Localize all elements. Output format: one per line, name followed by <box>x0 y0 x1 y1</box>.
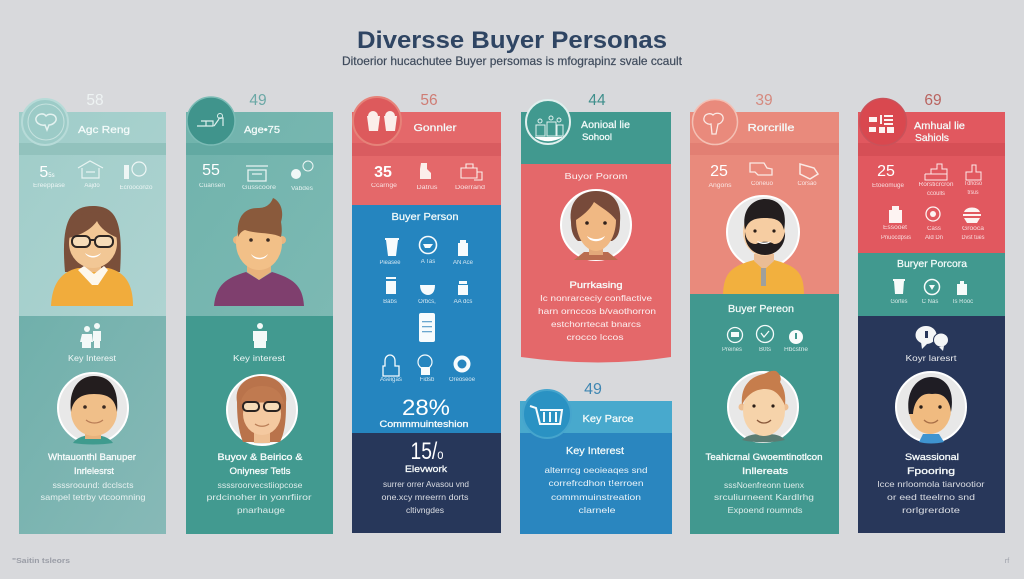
header label <box>914 120 965 144</box>
icon row: Hbcstne <box>784 347 809 353</box>
text block: or eed tteelrno snd <box>887 492 975 502</box>
avatar: man red hair <box>728 371 798 442</box>
header label: Agc Reng <box>78 124 130 136</box>
stat row: Cuansen <box>199 183 225 189</box>
text block: crocco lccos <box>566 332 624 342</box>
number: 56: 56 <box>420 92 438 109</box>
avatar: woman short hair <box>561 190 631 260</box>
stat row: Datrus <box>416 185 438 191</box>
icon grid: A Tas <box>421 259 435 265</box>
stat grid: Dvst tues <box>962 235 984 241</box>
footer note: left: "Saitin tsleors <box>12 558 70 565</box>
text block: prdcinoher in yonrfiiror <box>206 492 312 502</box>
stat row <box>708 163 818 189</box>
stat grid: ccoulls <box>927 191 945 197</box>
stat row <box>199 161 313 192</box>
text block: ssssroorvecstiiopcose <box>218 480 303 490</box>
icon grid: Oreoseoe <box>449 377 476 383</box>
stat row: 25 <box>710 163 728 180</box>
label: elevwork: Elevwork <box>405 464 447 475</box>
header label: Gonnler <box>414 122 457 134</box>
text block: Teahicrnal Gwoemtinotlcon <box>706 452 822 463</box>
icon: people <box>80 323 101 348</box>
person: bearded man <box>723 196 804 294</box>
person: woman with glasses <box>51 206 133 306</box>
icon row: Preines <box>722 347 742 353</box>
text block <box>40 452 146 502</box>
stat grid: Essooet <box>883 225 907 231</box>
text block <box>538 280 656 342</box>
header label: Sahiols <box>915 132 949 144</box>
text block: Buyov & Beirico & <box>218 452 303 463</box>
icon grid: Babs <box>383 299 397 305</box>
text block: lcce nrloomola tiarvootior <box>878 479 985 489</box>
stat grid: trsus <box>968 190 978 196</box>
person: man brown hair <box>214 198 304 306</box>
icon: cart badge <box>523 390 571 438</box>
text block: estchorrtecat bnarcs <box>551 319 641 329</box>
panel: persona 4 top <box>521 92 671 362</box>
icon grid: AA dcs <box>454 299 472 305</box>
stat grid: Tdhoso <box>964 181 983 187</box>
text block: Swassional <box>905 452 959 463</box>
stat row: Corsao <box>798 181 817 187</box>
text block: alterrrcg oeoieaqes snd <box>544 465 648 475</box>
text block: sssNoenfreonn tuenx <box>724 480 805 490</box>
text block: sampel tetrby vtcoomning <box>40 492 146 502</box>
icon grid: Pieasee <box>380 260 401 266</box>
avatar: woman glasses <box>227 375 297 445</box>
panel: persona 6 <box>858 92 1005 533</box>
text block: Oniynesr Tetls <box>230 466 291 477</box>
header label: Aonioal lie <box>581 119 630 131</box>
text block: srculiurneent Kardlrhg <box>714 492 814 502</box>
text block: Expoend roumnds <box>728 505 802 515</box>
text block: commmuinstreation <box>551 492 641 502</box>
text block: cltivngdes <box>406 505 444 515</box>
stat: 28%: 28% <box>402 395 450 420</box>
stat grid: Etoeomuge <box>872 183 905 189</box>
panel: persona 5 <box>690 92 839 534</box>
icon: chat bubbles <box>916 326 948 351</box>
text block <box>206 452 312 515</box>
header label: Rorcrille <box>748 122 795 134</box>
stat grid: Grooca <box>962 226 985 232</box>
header label: Amhual lie <box>914 120 965 132</box>
panel: persona 2 <box>186 92 333 534</box>
header label: Sohool <box>582 132 612 142</box>
text block: Ic nonrarceciy conflactive <box>540 293 652 303</box>
header label <box>581 119 630 142</box>
label: key interest: Koyr laresrt <box>906 353 957 363</box>
stat row <box>33 161 153 191</box>
text block: Purrkasing <box>570 280 622 291</box>
icon grid: Fidsb <box>420 377 435 383</box>
stat row: Ecrooconzo <box>120 185 153 191</box>
icon: person <box>253 323 267 348</box>
text block: correfrcdhon t!erroen <box>548 478 644 488</box>
panel: persona 4 bottom <box>520 381 672 534</box>
text block <box>706 452 822 515</box>
stat grid: Rorsticrcron <box>918 182 954 188</box>
text block <box>544 465 648 515</box>
icon row: Is Rooc <box>953 299 973 305</box>
stat row: Ereeppase <box>33 183 66 189</box>
header label: Key Parce <box>582 413 634 425</box>
icon: list badge <box>860 98 906 146</box>
icon: two figures badge <box>353 97 401 145</box>
text block: rorlgrerdote <box>902 505 960 515</box>
stat row: Doerrand <box>455 185 485 191</box>
text block: harn ornccos b/vaothorron <box>538 306 656 316</box>
icon: badge <box>187 97 235 145</box>
icon grid: AN Ace <box>453 260 474 266</box>
icon grid <box>380 236 476 383</box>
text block: Fpooring <box>907 466 955 477</box>
text block: surrer orrer Avasou vnd <box>383 479 469 489</box>
text block <box>382 479 469 515</box>
icon row: Gortes <box>890 299 908 305</box>
header label: Age•75 <box>244 124 280 136</box>
text block: Inrlelesrst <box>74 466 114 477</box>
subtitle: Ditoerior hucachutee Buyer persomas is mfograpinz svale ccault <box>342 54 683 68</box>
footer note: right: rf <box>1005 558 1009 565</box>
text block <box>878 452 985 515</box>
label: key interest: Key Interest <box>68 353 117 363</box>
stat grid: Pnuocdpsis <box>881 235 911 241</box>
text block: pnarhauge <box>237 505 285 515</box>
icon row: C Nas <box>922 299 938 305</box>
icon grid: Aseigas <box>380 377 402 383</box>
avatar: man dark hair <box>58 373 128 444</box>
avatar: man black hair <box>896 372 966 444</box>
icon row <box>890 279 973 305</box>
text block: ssssroound: dcclscts <box>52 480 134 490</box>
stat row: Vabdes <box>291 186 313 192</box>
stat row: 35 <box>374 164 392 181</box>
stat row: 55s <box>39 164 55 181</box>
icon: brain badge <box>692 100 738 144</box>
icon: group badge <box>526 100 570 144</box>
stat grid: Ald Dn <box>925 235 943 241</box>
text block: Inllereats <box>742 466 788 477</box>
heading: buyer person: Buyer Pereon <box>728 303 794 315</box>
stat row: Angons <box>708 183 732 189</box>
icon row: B0ts <box>759 347 771 353</box>
stat grid: Cass <box>927 226 941 232</box>
heading: key interest: Key Interest <box>566 445 624 457</box>
title: Diversse Buyer Personas <box>357 27 667 54</box>
panel: persona 1 <box>19 92 166 534</box>
number: 49: 49 <box>249 92 267 109</box>
stat row: Coneuo <box>751 181 774 187</box>
stat row: Gusscoore <box>242 185 277 191</box>
label: key interest: Key interest <box>233 353 286 363</box>
stat row: Ccarnge <box>371 183 398 189</box>
icon: brain badge <box>22 99 68 145</box>
number: 49: 49 <box>584 381 602 398</box>
heading: buyer person: Buyer Person <box>392 211 459 223</box>
stat row <box>371 163 485 191</box>
icon grid: Orbcs, <box>418 299 436 305</box>
stat grid <box>872 163 985 241</box>
heading: buyer person: Buryer Porcora <box>897 258 967 270</box>
text block: Whtauonthl Banuper <box>48 452 136 463</box>
stat: 15%: 15/o <box>410 438 444 465</box>
number: 39: 39 <box>755 92 773 109</box>
number: 69: 69 <box>924 92 942 109</box>
label: communication: Commmuinteshion <box>380 419 468 430</box>
text block: one.xcy mreerrn dorts <box>382 492 468 502</box>
number: 44: 44 <box>588 92 606 109</box>
text block: clarnele <box>578 505 616 515</box>
number: 58: 58 <box>86 92 104 109</box>
stat grid: 25 <box>877 163 895 180</box>
heading: buyer person: Buyor Porom <box>564 171 628 181</box>
stat row: Aajdo <box>84 183 100 189</box>
icon row <box>722 326 809 353</box>
panel: persona 3 <box>352 92 501 533</box>
stat row: 55 <box>202 162 220 179</box>
